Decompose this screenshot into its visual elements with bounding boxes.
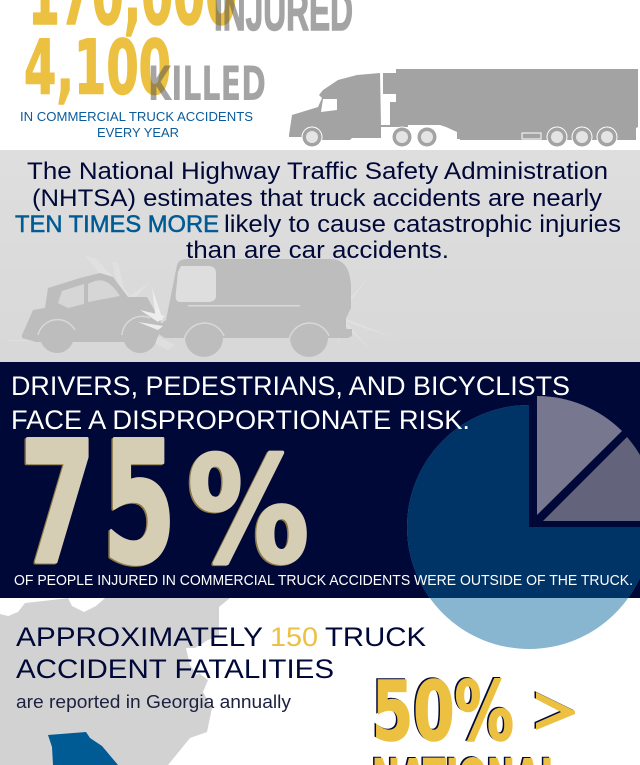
icon: truck and car crash [8, 255, 395, 357]
heading: approximately 150 truck accident fatalities: TRUCK [325, 622, 426, 652]
stat: 75 percent: % [188, 426, 309, 596]
map: eastern United States [0, 598, 230, 765]
text: NHTSA paragraph: The National Highway Traffic Safety Administration [27, 158, 608, 185]
stat: 50 percent above national: 50% [370, 664, 512, 759]
caption: people injured outside the truck: OF PEOPLE INJURED IN COMMERCIAL TRUCK ACCIDENTS WERE OUTSIDE OF THE TRUCK. [14, 573, 633, 589]
panel: truck accident statistics [0, 0, 640, 150]
stat: 75 percent: 5 [102, 406, 174, 602]
text: NHTSA paragraph: than are car accidents. [186, 237, 449, 264]
panel: disproportionate risk [0, 362, 640, 649]
stat: 75 percent: % [186, 427, 308, 597]
label: killed: KILLED [148, 57, 266, 112]
heading: approximately 150 truck accident fatalities [16, 627, 426, 678]
panel: NHTSA estimate [0, 150, 640, 362]
icon: semi truck silhouette [289, 69, 638, 148]
text: reported in Georgia annually: are reported in Georgia annually [16, 692, 291, 712]
pie chart: 75 percent [407, 396, 640, 649]
stat: 75 percent: 7 [18, 406, 94, 602]
text: NHTSA paragraph: likely to cause catastrophic injuries [224, 211, 621, 238]
icon: greater-than sign [536, 692, 575, 730]
caption: in commercial truck accidents: EVERY YEAR [97, 125, 179, 140]
heading: drivers, pedestrians and bicyclists: DRIVERS, PEDESTRIANS, AND BICYCLISTS [11, 371, 570, 401]
emphasis: ten times more: TEN TIMES MORE [15, 211, 219, 238]
map: Georgia highlighted [48, 732, 118, 765]
heading: drivers, pedestrians and bicyclists: FACE A DISPROPORTIONATE RISK. [11, 405, 470, 435]
text: NHTSA paragraph [15, 158, 621, 264]
number: 150: 150 [270, 622, 318, 652]
heading: approximately 150 truck accident fatalities: ACCIDENT FATALITIES [16, 654, 334, 684]
stat: 75 percent: 5 [103, 406, 176, 602]
heading: approximately 150 truck accident fatalities: APPROXIMATELY [16, 622, 263, 652]
stat: 75 percent: 7 [20, 406, 96, 602]
caption: in commercial truck accidents [21, 112, 252, 137]
stat: 50 percent above national: 50% [372, 665, 514, 760]
text: NHTSA paragraph: (NHTSA) estimates that truck accidents are nearly [32, 185, 602, 212]
panel: Georgia fatalities [0, 598, 575, 765]
stat: 4,100: 4,100 [24, 24, 171, 112]
heading: drivers, pedestrians and bicyclists [11, 371, 570, 435]
stat: 75 percent [18, 406, 309, 602]
caption: in commercial truck accidents: IN COMMERCIAL TRUCK ACCIDENTS [20, 109, 253, 124]
